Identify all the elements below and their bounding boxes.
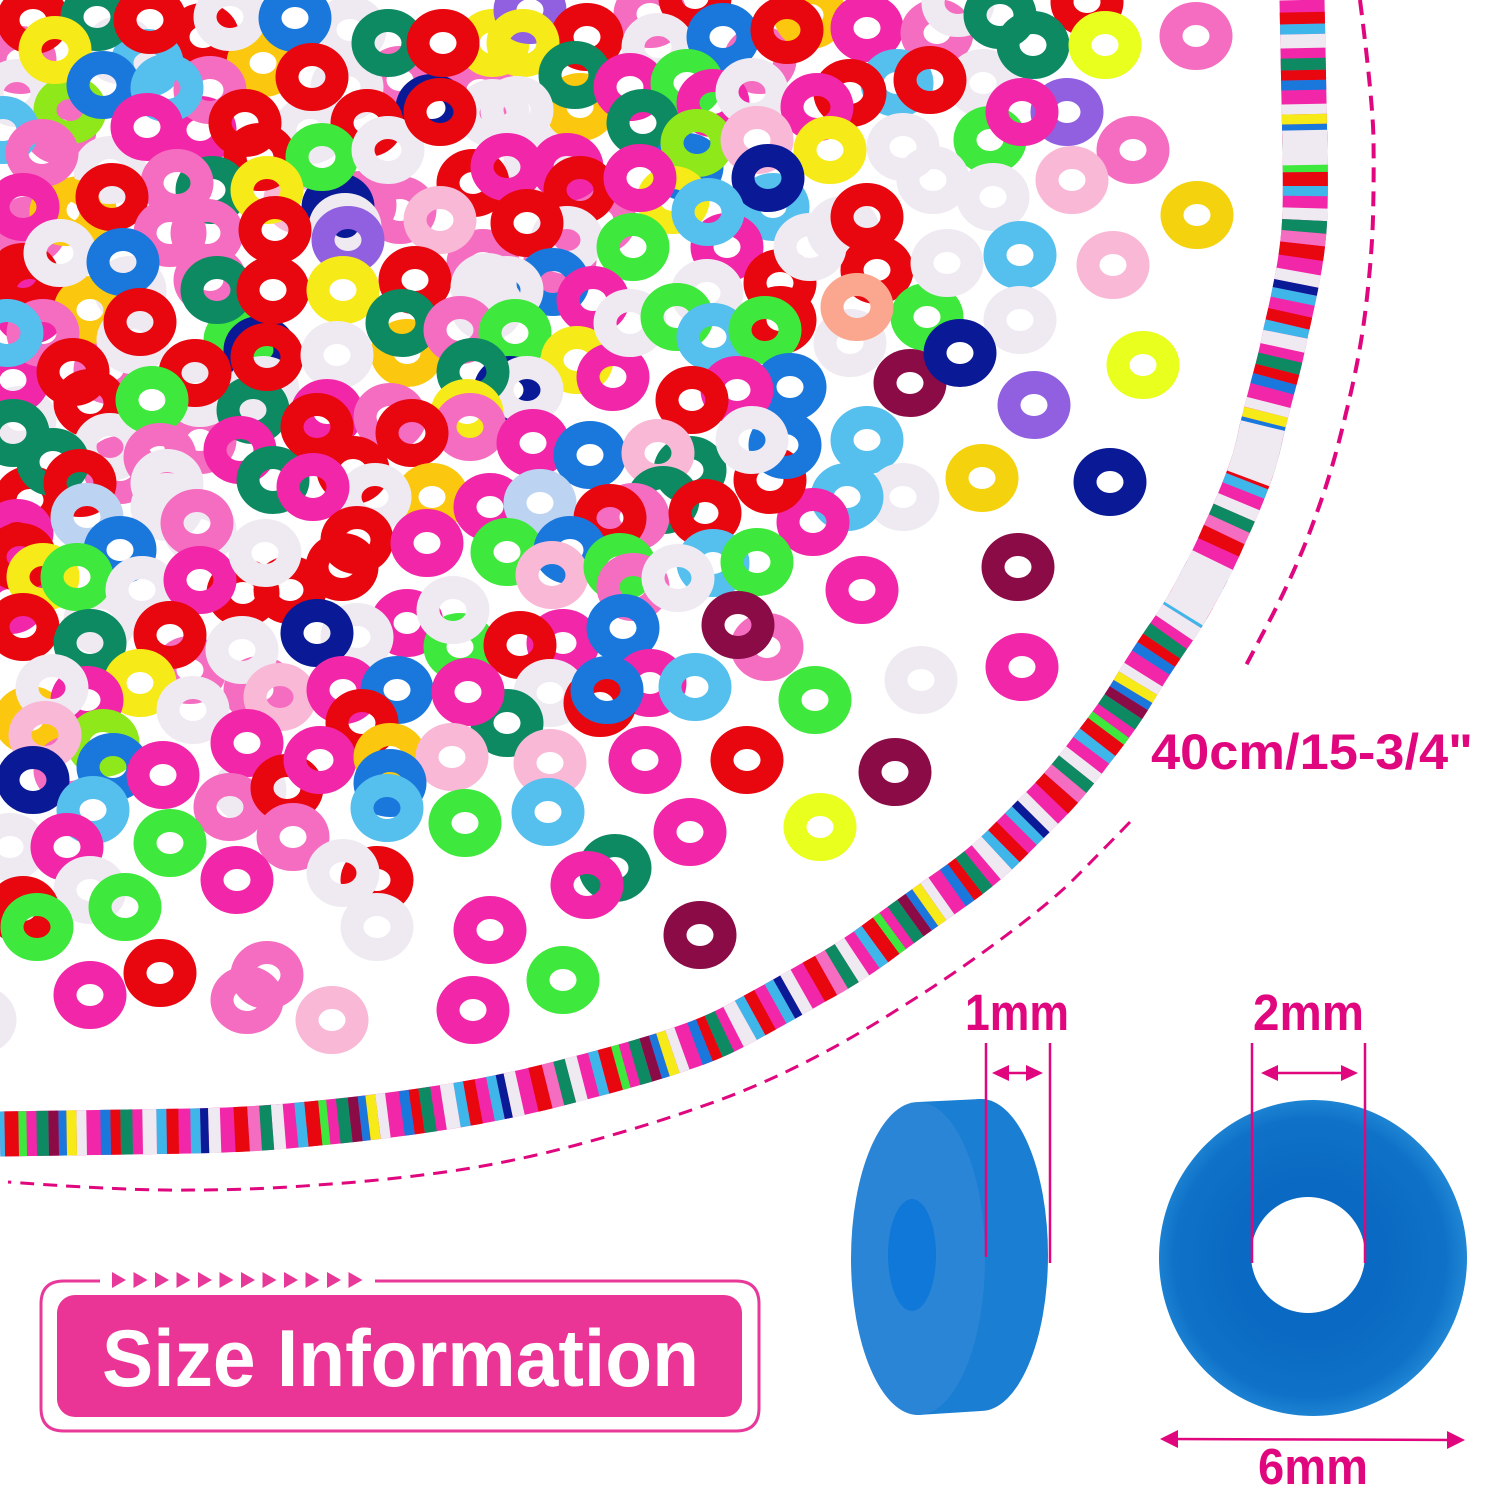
dimension: 6mm diameter: 6mm: [1258, 1438, 1368, 1495]
dashed length guide: lower arc: [8, 822, 1130, 1190]
pile of scattered clay beads: [0, 0, 1222, 1042]
size information badge: [41, 1272, 759, 1431]
badge frame: [41, 1281, 759, 1431]
dimension: 6mm diameter: [1160, 1430, 1465, 1495]
length label: 40cm/15-3/4": [1151, 724, 1473, 780]
dimension: 1mm thickness: [965, 984, 1069, 1263]
badge panel: [57, 1295, 742, 1417]
badge heading: Size Information: [102, 1314, 699, 1404]
dimension: 2mm hole: 2mm: [1253, 984, 1364, 1041]
dashed length guide: upper arc: [1243, 0, 1374, 671]
dimension: 1mm thickness: 1mm: [965, 984, 1069, 1041]
dimension: 2mm hole: [1252, 984, 1365, 1263]
arrow row: [112, 1272, 362, 1288]
side view blue bead: [851, 1099, 1048, 1415]
beaded string necklace: [0, 0, 1305, 1134]
front view blue bead: [1159, 1100, 1467, 1416]
